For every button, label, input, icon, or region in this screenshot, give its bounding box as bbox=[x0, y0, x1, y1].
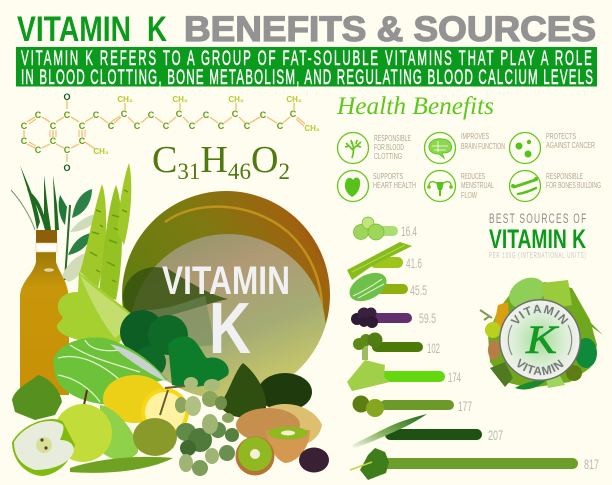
source bar: cabbage 45.5 bbox=[345, 267, 427, 307]
food illustration: lettuce bbox=[57, 272, 139, 345]
orb label: K bbox=[209, 289, 251, 369]
benefit: menstrual: REDUCES bbox=[461, 172, 485, 181]
health benefits heading: Health Benefits bbox=[336, 93, 494, 120]
source bar: cucumber 16.4 bbox=[354, 217, 417, 240]
chemical structure: C bbox=[50, 121, 57, 131]
badge arc text bottom: VITAMIN bbox=[517, 358, 564, 376]
best sources heading: PER 100G (INTERNATIONAL UNITS) bbox=[489, 252, 586, 260]
chemical formula: 2 bbox=[278, 159, 290, 184]
chemical formula: H bbox=[200, 139, 228, 181]
chemical structure: C bbox=[121, 109, 128, 119]
chemical structure: CH₃ bbox=[93, 147, 109, 156]
chemical structure: C bbox=[35, 110, 42, 120]
source bar: prune 59.5: 59.5 bbox=[419, 310, 436, 326]
food illustration: cabbage bbox=[53, 337, 168, 405]
benefit: heart: HEART HEALTH bbox=[373, 181, 416, 190]
chemical structure: C bbox=[64, 145, 71, 155]
source bar: kale 817: 817 bbox=[584, 456, 599, 472]
benefit: bones bbox=[510, 170, 601, 202]
source bar: green onion 207: 207 bbox=[488, 427, 503, 443]
source bar: prune 59.5 bbox=[351, 308, 436, 328]
benefit: brain function: IMPROVES bbox=[461, 132, 489, 141]
title: VITAMIN bbox=[17, 10, 131, 49]
food illustration: oil bottle bbox=[20, 230, 69, 395]
chemical structure: C bbox=[93, 110, 100, 120]
chemical structure: C bbox=[108, 121, 115, 131]
chemical structure: C bbox=[203, 110, 210, 120]
source bar: cucumber 16.4: 16.4 bbox=[401, 223, 417, 239]
benefit: bones: RESPONSIBLE bbox=[546, 172, 583, 181]
chemical structure: C bbox=[21, 136, 28, 146]
chemical formula: C bbox=[152, 139, 177, 181]
title: K bbox=[147, 10, 167, 49]
chemical structure: C bbox=[35, 145, 42, 155]
chemical formula: 31 bbox=[177, 159, 200, 184]
benefit: menstrual: MENSTRUAL bbox=[461, 181, 494, 190]
chemical formula: 46 bbox=[228, 159, 251, 184]
source bar: lettuce 174 bbox=[347, 360, 461, 391]
chemical structure: CH₃ bbox=[286, 95, 302, 104]
chemical structure: C bbox=[290, 109, 297, 119]
benefit: brain function bbox=[424, 132, 505, 164]
food illustration: spinach bbox=[120, 310, 229, 387]
vitamin K orb bbox=[122, 191, 330, 398]
source bar: asparagus 41.6: 41.6 bbox=[406, 255, 422, 271]
chemical structure: C bbox=[244, 121, 251, 131]
source bar: cabbage 45.5: 45.5 bbox=[410, 282, 427, 298]
chemical structure: CH₃ bbox=[228, 95, 244, 104]
food illustration: lemon bbox=[103, 375, 189, 436]
benefit: blood clotting: FOR BLOOD bbox=[374, 143, 404, 152]
food illustration: avocado bbox=[219, 363, 322, 444]
source bar: asparagus 41.6 bbox=[347, 242, 422, 280]
chemical structure bbox=[21, 92, 320, 173]
food illustration: kiwi bbox=[236, 408, 310, 476]
source bar: sprouts 177 bbox=[352, 396, 472, 417]
title: BENEFITS & SOURCES bbox=[184, 10, 596, 49]
chemical structure: C bbox=[148, 110, 155, 120]
badge K mark: K bbox=[525, 317, 560, 362]
chemical structure: C bbox=[50, 136, 57, 146]
source bar: green onion 207 bbox=[352, 414, 503, 448]
benefit: menstrual bbox=[424, 170, 494, 202]
benefit: brain function: BRAIN FUNCTION bbox=[461, 142, 505, 151]
benefit: heart: SUPPORTS bbox=[373, 172, 403, 181]
food illustration: asparagus bbox=[80, 163, 131, 300]
orb label bbox=[162, 259, 290, 369]
source bar: kale 817 bbox=[350, 448, 599, 480]
benefit: menstrual: FLOW bbox=[461, 191, 477, 200]
food illustration: apple bbox=[12, 390, 112, 476]
food illustration: pea pods bbox=[70, 457, 173, 473]
chemical structure: CH₃ bbox=[117, 95, 133, 104]
chemical structure: C bbox=[64, 110, 71, 120]
benefit: blood clotting bbox=[338, 132, 411, 164]
chemical structure: O bbox=[63, 92, 71, 102]
intro banner bbox=[16, 46, 597, 89]
chemical structure: CH₃ bbox=[304, 124, 320, 133]
food illustration: prune bbox=[299, 448, 329, 472]
food illustration: broccoli bbox=[12, 375, 62, 420]
badge arc text top: VITAMIN bbox=[510, 304, 568, 324]
benefit: cancer bbox=[510, 132, 595, 164]
source bar: lettuce 174: 174 bbox=[448, 369, 461, 385]
chemical formula: O bbox=[251, 139, 278, 181]
vitamin K badge with foods bbox=[480, 278, 603, 390]
chemical structure: C bbox=[260, 110, 267, 120]
chemical structure: C bbox=[277, 121, 284, 131]
chemical structure: C bbox=[189, 121, 196, 131]
best sources heading: BEST SOURCES OF bbox=[489, 212, 586, 227]
source bar: sprouts 177: 177 bbox=[458, 398, 472, 414]
best sources heading bbox=[489, 212, 586, 260]
chemical structure: C bbox=[232, 109, 239, 119]
benefit: blood clotting: RESPONSIBLE bbox=[374, 134, 411, 143]
orb label: VITAMIN bbox=[162, 259, 290, 303]
chemical structure: C bbox=[176, 109, 183, 119]
chemical structure: C bbox=[79, 121, 86, 131]
chemical structure: C bbox=[21, 121, 28, 131]
benefit: blood clotting: CLOTTING bbox=[374, 152, 402, 161]
chemical structure: C bbox=[163, 121, 170, 131]
chemical structure: C bbox=[79, 136, 86, 146]
source bar: broccoli 102 bbox=[353, 332, 440, 360]
benefit: heart bbox=[338, 170, 416, 202]
source bar: broccoli 102: 102 bbox=[427, 340, 440, 356]
benefit: cancer: PROTECTS bbox=[546, 132, 576, 141]
food illustration: herbs and onions bbox=[11, 165, 102, 282]
chemical structure: CH₃ bbox=[172, 95, 188, 104]
intro banner: IN BLOOD CLOTTING, BONE METABOLISM, AND REGULATING BLOOD CALCIUM LEVELS bbox=[21, 65, 593, 89]
food illustration: grapes bbox=[160, 377, 239, 476]
chemical structure: C bbox=[218, 121, 225, 131]
food illustration: pear and green fruit bbox=[100, 405, 177, 460]
title bbox=[17, 10, 596, 49]
intro banner: VITAMIN K REFERS TO A GROUP OF FAT-SOLUBLE VITAMINS THAT PLAY A ROLE bbox=[21, 46, 592, 70]
chemical structure: O bbox=[63, 163, 71, 173]
chemical structure: C bbox=[134, 121, 141, 131]
